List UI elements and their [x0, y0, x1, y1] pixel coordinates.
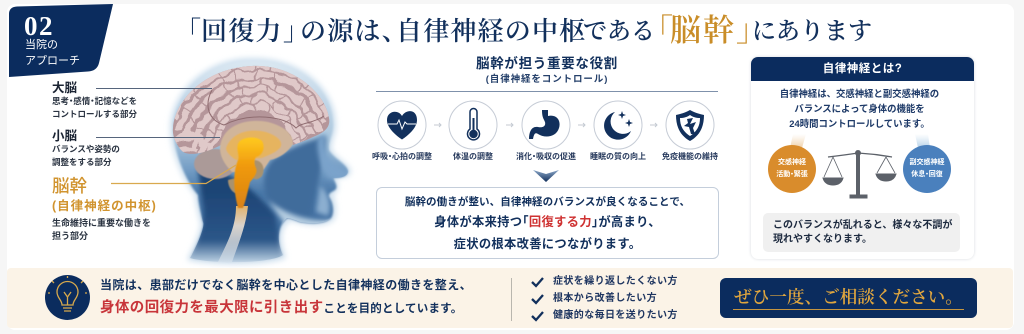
- icon captions: 体温の調整: [453, 152, 493, 161]
- title: 自律神経の中枢: [396, 17, 586, 46]
- title: 」: [283, 17, 310, 46]
- icon: light bulb: [45, 275, 90, 320]
- icon captions: 消化・吸収の促進: [516, 152, 576, 161]
- illustration: cerebellum: [194, 149, 236, 179]
- title: 脳幹: [670, 13, 736, 48]
- label: cerebellum: [52, 129, 120, 167]
- summary box: [376, 187, 719, 259]
- warning note: このバランスが乱れると、様々な不調が: [773, 220, 952, 231]
- title: 回復力: [201, 17, 283, 46]
- panel: autonomic nerve: [751, 57, 974, 259]
- icon: moon: [604, 111, 633, 140]
- title: にあります: [752, 19, 872, 45]
- badge number: 02: [24, 11, 54, 41]
- panel header: [751, 57, 974, 81]
- label: brainstem: [52, 176, 157, 241]
- arrows: [434, 123, 657, 127]
- panel description: 自律神経は、交感神経と副交感神経の: [780, 88, 939, 99]
- icon: thermometer: [468, 108, 480, 140]
- title: 」: [736, 13, 769, 48]
- parasympathetic circle: 副交感神経: [910, 159, 944, 166]
- label: cerebrum: 思考・感情・記憶などを: [52, 96, 137, 106]
- summary box: 症状の根本改善につながります。: [454, 237, 641, 251]
- banner message: [100, 278, 472, 316]
- icon row: [378, 100, 714, 150]
- label: cerebrum: コントロールする部分: [52, 109, 137, 119]
- roles heading: (自律神経をコントロール): [486, 74, 608, 85]
- title: [175, 13, 872, 48]
- title: 「: [642, 13, 675, 48]
- illustration: head and brain: [96, 56, 353, 267]
- label: cerebellum: 調整をする部分: [52, 157, 112, 167]
- illustration: cerebrum: [172, 66, 330, 154]
- title: である: [583, 19, 655, 45]
- badge text: アプローチ: [25, 54, 80, 66]
- icon captions: [372, 152, 718, 161]
- roles heading: 脳幹が担う重要な役割: [476, 56, 618, 71]
- label: brainstem: 担う部分: [52, 231, 88, 241]
- label: cerebellum: 小脳: [52, 129, 77, 143]
- check list: 根本から改善したい方: [553, 293, 657, 304]
- panel description: 24時間コントロールしています。: [789, 118, 930, 129]
- icon: shield: [676, 110, 704, 141]
- badge text: [25, 38, 80, 66]
- illustration: limbic system: [220, 121, 293, 193]
- label: brainstem: (自律神経の中枢): [52, 199, 157, 213]
- connector: cerebrum: [96, 88, 212, 90]
- label: brainstem: 脳幹: [52, 176, 87, 196]
- sympathetic circle: [768, 145, 816, 193]
- warning note: 現れやすくなります。: [773, 234, 872, 245]
- icon captions: 呼吸・心拍の調整: [372, 152, 432, 161]
- title: 「: [175, 17, 202, 46]
- panel description: バランスによって身体の機能を: [794, 103, 925, 114]
- roles heading: [376, 54, 718, 92]
- bottom banner: [7, 268, 1013, 328]
- panel description: [780, 88, 939, 129]
- section badge: [9, 4, 113, 77]
- label: cerebellum: バランスや姿勢の: [52, 144, 120, 154]
- call to action: [720, 278, 977, 318]
- summary box: 脳幹の働きが整い、自律神経のバランスが良くなることで、: [405, 196, 690, 208]
- label: cerebrum: 大脳: [52, 81, 77, 95]
- sympathetic circle: 交感神経: [778, 159, 806, 166]
- illustration: brainstem: [218, 137, 264, 262]
- parasympathetic circle: 休息・回復: [911, 171, 943, 178]
- badge text: 当院の: [25, 39, 58, 51]
- title: の源は、: [300, 17, 409, 46]
- scale diagram: [790, 136, 930, 198]
- icon captions: 免疫機能の維持: [662, 152, 718, 161]
- label: brainstem: 生命維持に重要な働きを: [52, 218, 151, 228]
- icon: heart: [387, 111, 417, 140]
- panel header: 自律神経とは?: [823, 63, 902, 75]
- summary box: 身体が本来持つ「回復する力」が高まり、: [434, 215, 661, 229]
- label: cerebrum: [52, 81, 137, 119]
- divider: [511, 278, 512, 321]
- check list: 症状を繰り返したくない方: [553, 276, 678, 287]
- connector: brainstem: [111, 165, 236, 184]
- connector: cerebellum: [96, 136, 220, 138]
- banner message: 当院は、患部だけでなく脳幹を中心とした自律神経の働きを整え、: [100, 278, 472, 292]
- icon: stomach: [529, 110, 560, 139]
- check list: [531, 275, 678, 322]
- down arrow: [533, 170, 559, 182]
- parasympathetic circle: [903, 145, 951, 193]
- banner message: 身体の回復力を最大限に引き出すことを目的としています。: [100, 300, 462, 316]
- call to action: ぜひ一度、ご相談ください。: [734, 287, 963, 307]
- icon captions: 睡眠の質の向上: [590, 152, 646, 161]
- check list: 健康的な毎日を送りたい方: [553, 310, 678, 321]
- sympathetic circle: 活動・緊張: [776, 171, 808, 178]
- warning note: [763, 213, 960, 252]
